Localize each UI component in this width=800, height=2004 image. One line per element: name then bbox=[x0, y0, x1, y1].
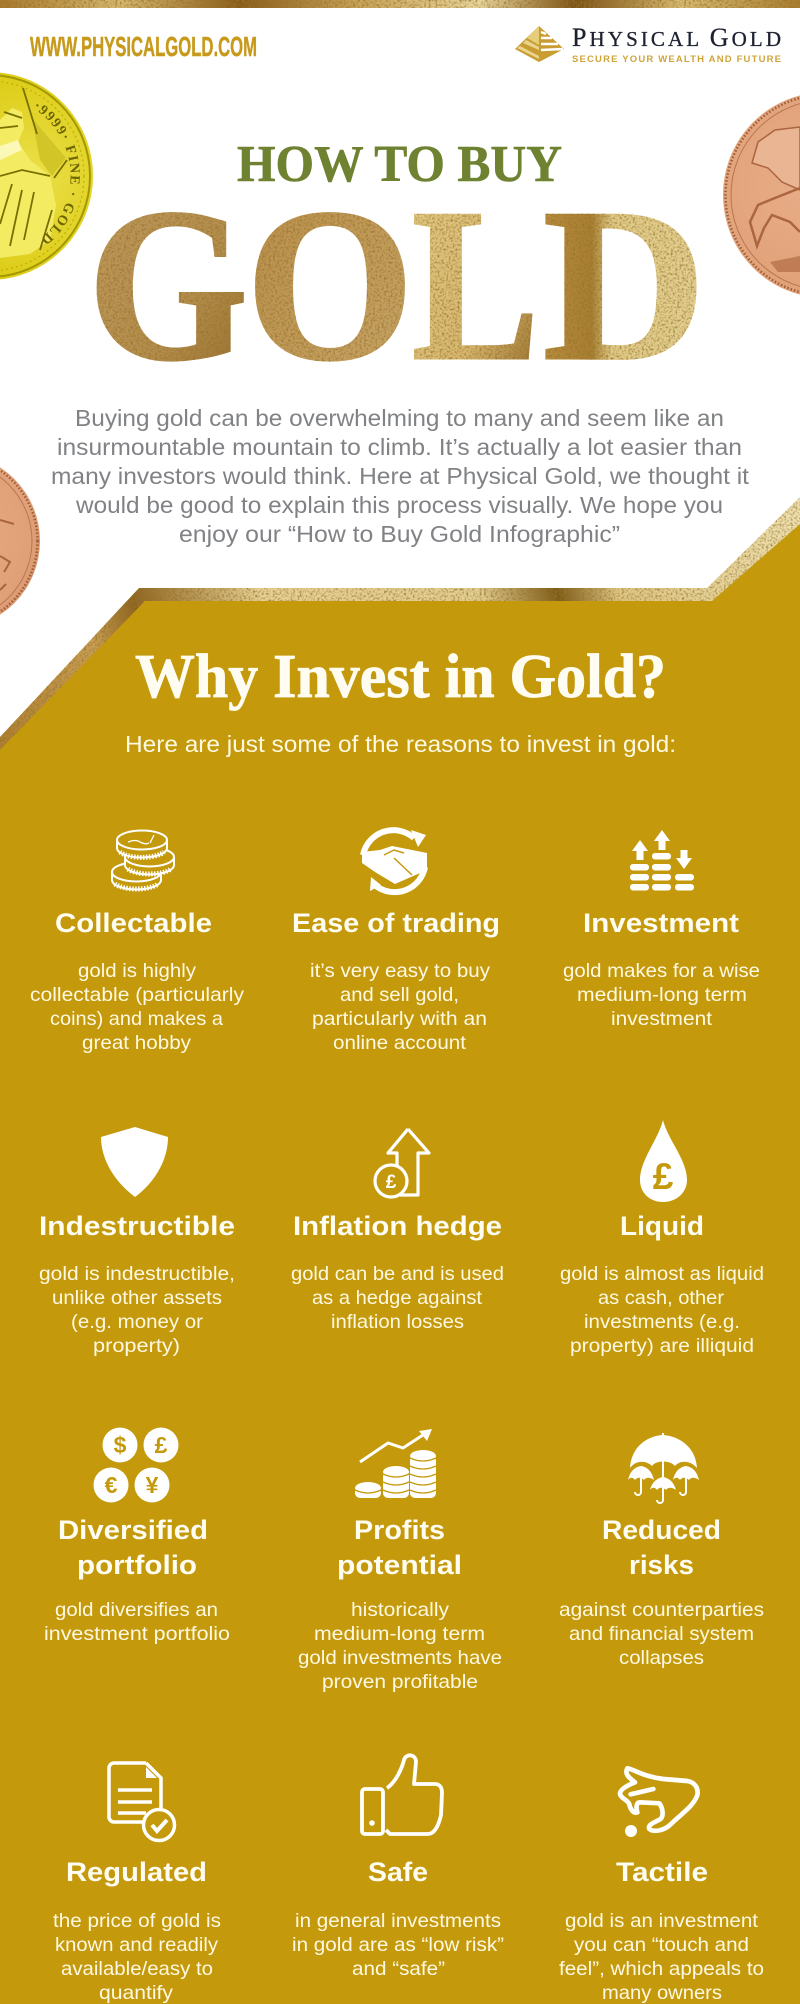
icon: pyramid bbox=[515, 26, 564, 62]
icon: pound droplet: £ bbox=[653, 1156, 674, 1197]
top foil bar bbox=[0, 0, 800, 8]
icon: arrow and pound coin: £ bbox=[386, 1172, 397, 1193]
description: particularly with an bbox=[312, 1008, 487, 1030]
heading: Ease of trading bbox=[292, 908, 500, 938]
description: as a hedge against bbox=[312, 1287, 483, 1309]
intro paragraph: would be good to explain this process visually. We hope you bbox=[75, 492, 723, 518]
card: diversified portfolio bbox=[44, 1428, 230, 1645]
description: gold investments have bbox=[298, 1647, 502, 1669]
heading: Inflation hedge bbox=[293, 1211, 502, 1241]
coin inscription: ·9999· FINE · GOLD bbox=[36, 104, 80, 244]
title: how to buy: HOW TO BUY bbox=[237, 136, 562, 193]
description bbox=[44, 1599, 230, 1645]
brand name: PHYSICAL GOLD bbox=[572, 23, 781, 52]
description bbox=[298, 1599, 502, 1693]
description: collapses bbox=[619, 1647, 704, 1669]
icon: coins bbox=[112, 830, 174, 890]
description: proven profitable bbox=[322, 1671, 478, 1693]
description bbox=[559, 1599, 764, 1669]
heading: Profits bbox=[354, 1515, 445, 1545]
description: gold can be and is used bbox=[291, 1263, 504, 1285]
description: gold is an investment bbox=[565, 1910, 759, 1932]
card: liquid bbox=[560, 1120, 764, 1357]
description: investment bbox=[611, 1008, 713, 1030]
icon: pinching hand bbox=[620, 1768, 698, 1837]
heading: risks bbox=[629, 1550, 694, 1580]
title: gold foil lettering: D bbox=[543, 165, 706, 406]
icon: bars and arrows bbox=[630, 830, 694, 890]
card: ease of trading bbox=[292, 830, 500, 1054]
card: inflation hedge bbox=[291, 1129, 504, 1333]
description: inflation losses bbox=[331, 1311, 464, 1333]
icon: currency discs bbox=[94, 1428, 178, 1502]
title: gold foil lettering: G bbox=[88, 165, 248, 406]
intro paragraph: insurmountable mountain to climb. It’s actually a lot easier than bbox=[57, 434, 742, 460]
coin: lower left sovereign bbox=[0, 453, 40, 629]
description: and “safe” bbox=[352, 1958, 445, 1980]
icon: currency discs: ¥ bbox=[146, 1472, 159, 1498]
intro paragraph: enjoy our “How to Buy Gold Infographic” bbox=[179, 521, 620, 547]
icon: document with check bbox=[109, 1763, 174, 1840]
icon: pound droplet bbox=[640, 1120, 687, 1202]
icon: currency discs: £ bbox=[155, 1432, 168, 1458]
title: gold foil lettering: O bbox=[246, 165, 414, 406]
icon: handshake with arrows bbox=[362, 830, 427, 892]
card: tactile bbox=[559, 1768, 764, 2004]
icon: currency discs: $ bbox=[114, 1432, 127, 1458]
description: gold is highly bbox=[78, 960, 196, 982]
heading bbox=[58, 1515, 208, 1580]
heading bbox=[337, 1515, 462, 1580]
logo: Physical Gold bbox=[515, 23, 781, 65]
description: and sell gold, bbox=[340, 984, 459, 1006]
intro paragraph bbox=[51, 405, 749, 547]
tagline: SECURE YOUR WEALTH AND FUTURE bbox=[572, 54, 781, 65]
heading: portfolio bbox=[77, 1550, 197, 1580]
description: gold diversifies an bbox=[55, 1599, 218, 1621]
card: reduced risks bbox=[559, 1433, 764, 1669]
description: as cash, other bbox=[598, 1287, 725, 1309]
description: historically bbox=[351, 1599, 449, 1621]
description: known and readily bbox=[55, 1934, 218, 1956]
heading: Indestructible bbox=[39, 1211, 235, 1241]
heading: Tactile bbox=[616, 1857, 708, 1887]
panel: why invest in gold bbox=[0, 524, 800, 2004]
description: gold is almost as liquid bbox=[560, 1263, 764, 1285]
heading: why invest in gold: Why Invest in Gold? bbox=[135, 643, 666, 711]
card: collectable bbox=[30, 830, 244, 1054]
description bbox=[559, 1910, 764, 2004]
website url: WWW.PHYSICALGOLD.COM bbox=[30, 31, 257, 62]
description: it’s very easy to buy bbox=[310, 960, 490, 982]
heading: Reduced bbox=[602, 1515, 721, 1545]
description: gold makes for a wise bbox=[563, 960, 760, 982]
description: many owners bbox=[602, 1982, 722, 2004]
description: medium-long term bbox=[577, 984, 747, 1006]
description: you can “touch and bbox=[574, 1934, 749, 1956]
description: collectable (particularly bbox=[30, 984, 244, 1006]
heading: Investment bbox=[583, 908, 739, 938]
description: in gold are as “low risk” bbox=[292, 1934, 504, 1956]
description: in general investments bbox=[295, 1910, 501, 1932]
card: safe bbox=[292, 1755, 504, 1980]
card: regulated bbox=[53, 1763, 221, 2004]
description: online account bbox=[333, 1032, 467, 1054]
description: quantify bbox=[99, 1982, 173, 2004]
description: medium-long term bbox=[314, 1623, 485, 1645]
intro paragraph: many investors would think. Here at Physical Gold, we thought it bbox=[51, 463, 749, 489]
description: unlike other assets bbox=[52, 1287, 222, 1309]
description bbox=[310, 960, 490, 1054]
card: investment bbox=[563, 830, 760, 1030]
heading: potential bbox=[337, 1550, 462, 1580]
foil band above gold panel bbox=[0, 497, 800, 755]
description bbox=[560, 1263, 764, 1357]
coin: yellow gold Britannia bbox=[0, 72, 93, 280]
icon: thumbs up bbox=[362, 1755, 442, 1834]
description: available/easy to bbox=[61, 1958, 213, 1980]
description: gold is indestructible, bbox=[39, 1263, 235, 1285]
icon: umbrellas bbox=[628, 1433, 699, 1503]
description bbox=[563, 960, 760, 1030]
description bbox=[39, 1263, 235, 1357]
icon: currency discs: € bbox=[105, 1472, 118, 1498]
card: profits potential bbox=[298, 1429, 502, 1693]
description: (e.g. money or bbox=[71, 1311, 204, 1333]
title: gold foil lettering bbox=[88, 165, 706, 406]
description: property) are illiquid bbox=[570, 1335, 754, 1357]
subheading: Here are just some of the reasons to invest in gold: bbox=[125, 731, 676, 757]
description bbox=[53, 1910, 221, 2004]
heading: Liquid bbox=[620, 1211, 704, 1241]
title: gold foil lettering: L bbox=[412, 165, 539, 406]
icon: arrow and pound coin bbox=[375, 1129, 429, 1197]
description bbox=[291, 1263, 504, 1333]
description: against counterparties bbox=[559, 1599, 764, 1621]
description: feel”, which appeals to bbox=[559, 1958, 764, 1980]
icon: shield bbox=[101, 1127, 168, 1197]
coin: right sovereign bbox=[723, 92, 800, 298]
description: property) bbox=[93, 1335, 180, 1357]
heading: Diversified bbox=[58, 1515, 208, 1545]
description bbox=[30, 960, 244, 1054]
icon: rising coin stacks bbox=[355, 1429, 436, 1498]
description: investment portfolio bbox=[44, 1623, 230, 1645]
card: indestructible bbox=[39, 1127, 235, 1357]
description: coins) and makes a bbox=[50, 1008, 223, 1030]
heading: Regulated bbox=[66, 1857, 207, 1887]
description bbox=[292, 1910, 504, 1980]
heading: Collectable bbox=[55, 908, 212, 938]
heading bbox=[602, 1515, 721, 1580]
description: great hobby bbox=[82, 1032, 191, 1054]
heading: Safe bbox=[368, 1857, 428, 1887]
description: investments (e.g. bbox=[584, 1311, 740, 1333]
description: the price of gold is bbox=[53, 1910, 221, 1932]
intro paragraph: Buying gold can be overwhelming to many and seem like an bbox=[75, 405, 724, 431]
description: and financial system bbox=[569, 1623, 754, 1645]
